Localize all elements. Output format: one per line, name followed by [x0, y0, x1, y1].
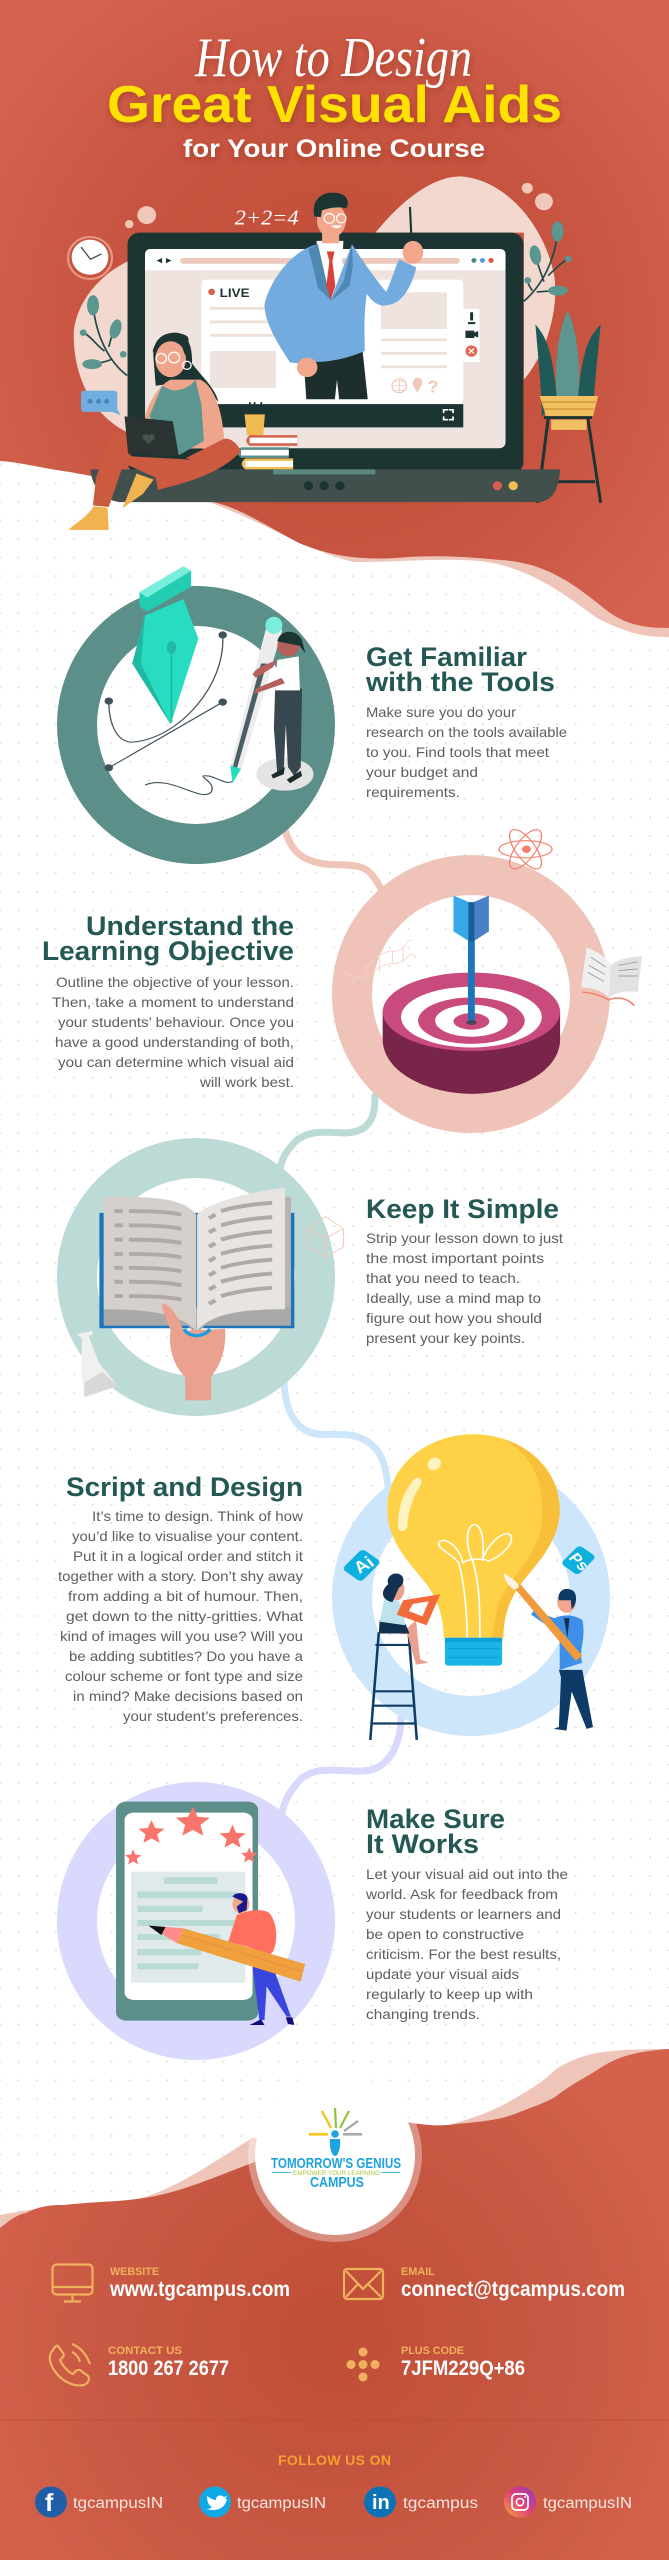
target rings [383, 972, 560, 1051]
step 3 heading: Keep It Simple [366, 1194, 559, 1224]
step 4 body: Put it in a logical order and stitch it [73, 1548, 303, 1564]
social: facebook: f [45, 2489, 54, 2517]
glasses [324, 213, 346, 223]
illustration: phone with star rating [116, 1802, 305, 2025]
logo tagline: EMPOWER YOUR LEARNING [293, 2170, 380, 2177]
nib cap [139, 566, 191, 612]
connector 4 to 5 [281, 1717, 401, 1815]
logo mark [309, 2108, 362, 2156]
map and help icons [392, 377, 438, 397]
trousers [304, 351, 368, 399]
connector 2 to 3 [279, 1096, 375, 1175]
pointer stick [410, 207, 413, 262]
badge: Ps: Ps [565, 1551, 592, 1574]
step 5 body: your students or learners and [366, 1906, 561, 1922]
ring [352, 1478, 590, 1716]
bezier curves [109, 635, 232, 795]
phone screen [125, 1813, 253, 2000]
icon: wall clock [67, 236, 113, 280]
plant: right sprig [524, 221, 572, 301]
small laptop [125, 416, 179, 458]
step 5 body: criticism. For the best results, [366, 1946, 561, 1962]
logo wordmark: TOMORROW'S GENIUS [271, 2155, 401, 2172]
bulb glass [387, 1434, 560, 1638]
reviewer head [232, 1895, 250, 1913]
bulb shade [491, 1440, 560, 1638]
step 4 body [58, 1508, 304, 1724]
head [155, 341, 186, 377]
step 2 body: have a good understanding of both, [55, 1034, 294, 1050]
laptop base [90, 469, 560, 502]
arrow [453, 896, 489, 1025]
step 2 body: Then, take a moment to understand [52, 994, 294, 1010]
step 3: keep it simple [77, 1158, 343, 1400]
browser bar [145, 249, 506, 270]
torso skin [145, 380, 224, 449]
step 1 body: your budget and [366, 764, 478, 780]
step 4 body: It’s time to design. Think of how [92, 1508, 304, 1524]
icon: chat bubble [81, 391, 121, 415]
badge: Ai: Ai [350, 1553, 378, 1577]
step 3 body: that you need to teach. [366, 1270, 520, 1286]
step 1 body: requirements. [366, 784, 460, 800]
connector 3 to 4 [284, 1381, 389, 1495]
hand at hip [297, 358, 317, 377]
footer wave [0, 2049, 669, 2560]
step 4 body: together with a story. Don’t shy away [58, 1568, 303, 1584]
blue cover [99, 1213, 294, 1328]
step 2 body: Outline the objective of your lesson. [56, 974, 294, 990]
laptop inner screen [145, 249, 506, 448]
step 1 body [366, 704, 567, 800]
logo campus: CAMPUS [310, 2174, 364, 2191]
social: twitter: tgcampusIN [237, 2495, 326, 2512]
books and pencil cup [238, 402, 297, 469]
tie [326, 251, 335, 300]
left page [104, 1197, 196, 1331]
shoes [68, 474, 154, 530]
laptop heart [143, 434, 155, 444]
background blobs [74, 176, 555, 433]
decorative dots [125, 183, 553, 228]
right designer [503, 1573, 593, 1731]
step 4 body: in mind? Make decisions based on [73, 1688, 303, 1704]
step 5 body: world. Ask for feedback from [365, 1886, 558, 1902]
title line: subtitle: for Your Online Course [183, 135, 485, 163]
step 1 body: Make sure you do your [366, 704, 516, 720]
icon: atom [499, 826, 552, 873]
step 4 body: get down to the nitty-gritties. What [66, 1608, 303, 1624]
step 5 body: changing trends. [366, 2006, 480, 2022]
step 5 body: Let your visual aid out into the [366, 1866, 568, 1882]
title [107, 27, 562, 163]
spine [184, 1329, 210, 1336]
back page [285, 1197, 291, 1309]
jacket lapels [308, 244, 353, 301]
icon: envelope [344, 2269, 383, 2299]
review lines [137, 1877, 237, 1969]
connector 1 to 2 [284, 826, 383, 895]
title line: script: How to Design [194, 27, 472, 89]
illustration: light bulb with designers [342, 1434, 596, 1740]
step 2 heading [42, 911, 294, 966]
placeholder content [210, 292, 447, 388]
ring [352, 875, 590, 1113]
step 4 body: kind of images will you use? Will you [60, 1628, 303, 1644]
step 3 body: present your key points. [366, 1330, 525, 1346]
value: 1800 267 2677 [108, 2357, 229, 2380]
step 4 body: from adding a bit of humour. Then, [68, 1588, 303, 1604]
step 4 heading: Script and Design [66, 1472, 303, 1502]
reviewer shoes [250, 2017, 294, 2025]
hand [162, 1304, 225, 1400]
step 5 body: be open to constructive [366, 1926, 524, 1942]
control bar [218, 404, 463, 427]
highlights [398, 1456, 443, 1531]
step 5 body: update your visual aids [366, 1966, 519, 1982]
badge disc [255, 2075, 415, 2235]
step 1 heading [365, 642, 555, 697]
social: facebook: tgcampusIN [73, 2495, 163, 2512]
woman figure [274, 689, 302, 776]
step 3 body: the most important points [366, 1250, 544, 1266]
plant on stool [535, 310, 601, 503]
hero illustration: laptop with teacher and student [67, 176, 601, 530]
step 2 body: will work best. [199, 1074, 294, 1090]
reviewer hair [232, 1893, 247, 1913]
phone body [116, 1802, 258, 2021]
contact: plus code [346, 2345, 525, 2382]
back hair [153, 333, 218, 402]
plant: left sprig [80, 295, 127, 376]
left designer [379, 1574, 440, 1665]
social: twitter [199, 2486, 326, 2518]
legs [93, 433, 241, 507]
badge: Ai [342, 1549, 381, 1582]
header wave [0, 0, 669, 637]
value: 7JFM229Q+86 [401, 2357, 525, 2380]
reviewer shirt [228, 1910, 276, 1955]
value: www.tgcampus.com [109, 2278, 290, 2301]
ladder [370, 1632, 417, 1740]
step 2 heading: Understand the [86, 911, 294, 941]
tank top [149, 380, 204, 455]
left page lines [114, 1211, 181, 1300]
student [68, 333, 241, 530]
head [317, 203, 346, 238]
nib [132, 599, 198, 724]
label: CONTACT US [108, 2345, 182, 2357]
ring [77, 1802, 315, 2040]
step 2 body: your students’ behaviour. Once you [58, 1014, 294, 1030]
step 2 heading: Learning Objective [42, 936, 294, 966]
contact: email [344, 2266, 625, 2301]
teacher [264, 193, 423, 399]
smile [331, 225, 342, 228]
step 4 body: be adding subtitles? Do you have a [69, 1648, 303, 1664]
step 2 body [52, 974, 294, 1090]
page stack [104, 1307, 291, 1334]
contact: phone [50, 2344, 229, 2385]
step 2 body: you can determine which visual aid [58, 1054, 294, 1070]
step 4 body: you’d like to visualise your content. [72, 1528, 303, 1544]
live label: LIVE [220, 286, 250, 300]
connector lines [279, 826, 401, 1815]
floor disc [256, 758, 314, 791]
step 2: understand the learning objective [343, 826, 642, 1113]
step 3 body: figure out how you should [366, 1310, 542, 1326]
equation: 2+2=4 [235, 206, 299, 229]
social: instagram [504, 2486, 632, 2518]
label: EMAIL [401, 2266, 435, 2278]
shirt [317, 241, 343, 300]
ring [77, 606, 315, 844]
live label [208, 286, 250, 300]
value: connect@tgcampus.com [401, 2278, 625, 2301]
icon: dna [343, 940, 416, 987]
illustration: open book in hand [77, 1188, 343, 1400]
giant pencil [148, 1926, 305, 1982]
filament [438, 1525, 511, 1638]
right page lines [209, 1203, 272, 1304]
social: instagram: tgcampusIN [543, 2495, 632, 2512]
glasses [156, 352, 180, 363]
earring [183, 361, 191, 369]
step 1: get familiar with the tools [77, 566, 315, 844]
social: facebook [35, 2486, 163, 2518]
step 4 body: colour scheme or font type and size [65, 1668, 303, 1684]
icon: monitor [52, 2264, 92, 2302]
step 4: script and design [342, 1434, 596, 1740]
step 3 body: Ideally, use a mind map to [366, 1290, 541, 1306]
hand holding stick [403, 241, 423, 264]
step 5 heading [366, 1804, 505, 1859]
right page [197, 1188, 285, 1331]
step 4 body: your student’s preferences. [123, 1708, 303, 1724]
giant pencil [230, 626, 282, 771]
step 3 body [366, 1230, 563, 1346]
map and help icons: ? [427, 377, 438, 397]
fringe [153, 333, 189, 355]
hair [314, 193, 348, 217]
neck [322, 229, 339, 243]
bulb base [445, 1638, 502, 1666]
badge: Ps [561, 1545, 596, 1575]
step 1 heading: with the Tools [365, 667, 555, 697]
icon: plus code dots [346, 2348, 380, 2382]
label: WEBSITE [110, 2266, 159, 2278]
step 5 heading: It Works [366, 1829, 479, 1859]
review card [131, 1872, 245, 1983]
icon: cube [308, 1216, 343, 1257]
social: linkedin: tgcampus [403, 2495, 478, 2512]
step 5 heading: Make Sure [366, 1804, 505, 1834]
icon: flask [77, 1331, 118, 1398]
step 3 body: Strip your lesson down to just [366, 1230, 563, 1246]
stars [125, 1807, 257, 1864]
jacket [264, 244, 416, 363]
target side [383, 1012, 560, 1094]
badge halo [248, 2068, 422, 2242]
icon: phone [50, 2344, 90, 2385]
video panel [201, 280, 463, 404]
icon: open book [581, 947, 642, 1006]
ring [77, 1158, 315, 1396]
illustration: pen tool [105, 566, 314, 795]
laptop screen frame [128, 233, 523, 474]
label: PLUS CODE [401, 2345, 464, 2357]
step 5 body: regularly to keep up with [366, 1986, 533, 2002]
laptop [90, 233, 560, 502]
side toolbar [463, 309, 479, 362]
contact: website [52, 2264, 290, 2302]
step 5 body [365, 1866, 568, 2022]
follow us heading: FOLLOW US ON [278, 2452, 391, 2468]
social: linkedin: in [372, 2492, 390, 2514]
step 5: make sure it works [77, 1802, 315, 2040]
step 1 body: to you. Find tools that meet [366, 744, 549, 760]
step 1 heading: Get Familiar [366, 642, 527, 672]
title line: yellow: Great Visual Aids [107, 76, 562, 134]
logo badge [248, 2068, 422, 2242]
step 1 body: research on the tools available [366, 724, 567, 740]
reviewer legs [253, 1967, 291, 2020]
illustration: target and arrow [343, 826, 642, 1094]
social: linkedin [364, 2486, 478, 2518]
